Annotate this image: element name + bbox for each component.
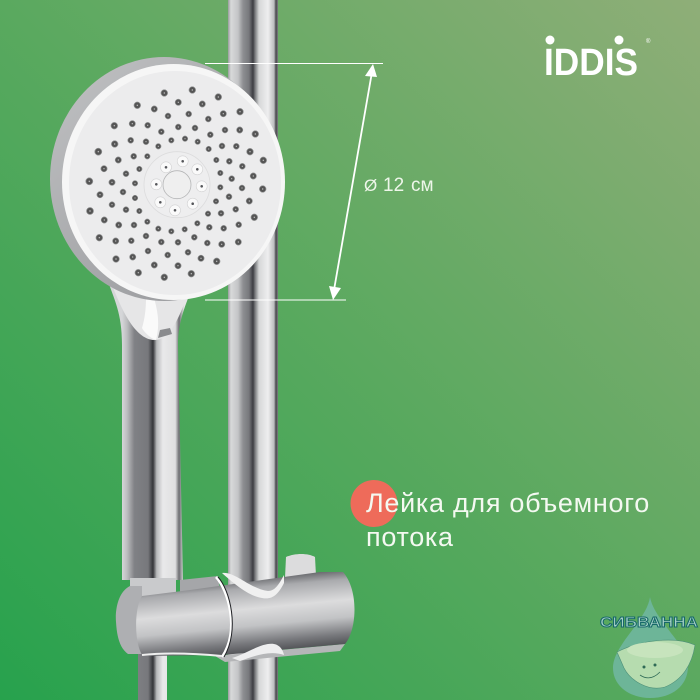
diameter arrow (329, 64, 377, 300)
diameter label: 12 (383, 175, 404, 196)
shower head (50, 57, 285, 301)
caption: Лейка для объемного (366, 488, 650, 518)
shower rail (228, 0, 278, 700)
sliding rail clamp (116, 554, 354, 700)
nozzle field (86, 87, 267, 281)
watermark logo: СИБВАННА (600, 597, 698, 698)
top dimension line (205, 62, 383, 64)
central massage nozzles (144, 152, 210, 218)
diameter label: см (411, 175, 434, 196)
diameter label: Ø (364, 176, 377, 195)
caption: потока (366, 522, 454, 552)
brand logo: ® (646, 38, 651, 45)
handle of the shower head (107, 278, 193, 580)
watermark logo: СИБВАННА: СИБВАННА (600, 614, 698, 631)
bottom dimension line (205, 299, 346, 301)
coral accent circle (350, 480, 398, 527)
brand logo: IDDIS (544, 42, 638, 84)
